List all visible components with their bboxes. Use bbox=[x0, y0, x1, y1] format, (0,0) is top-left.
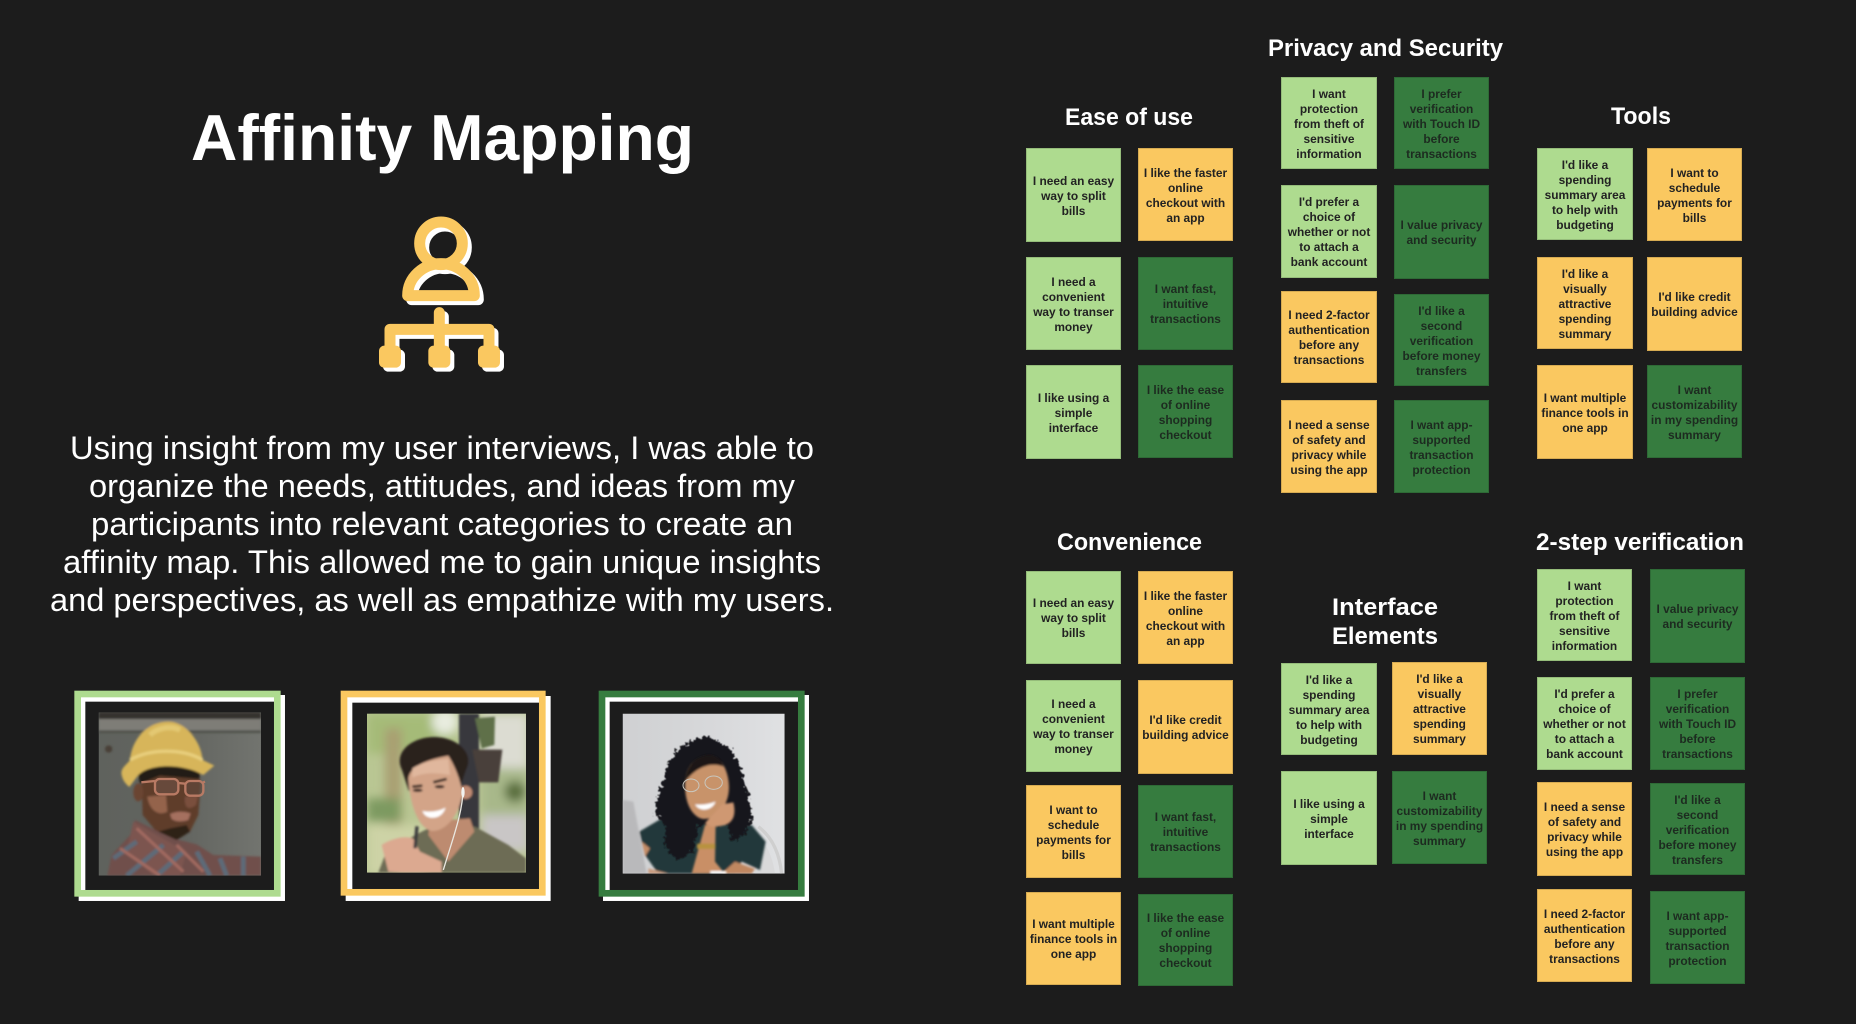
note: one app bbox=[1051, 947, 1096, 961]
note bbox=[1650, 891, 1745, 984]
note: I like using a bbox=[1038, 390, 1109, 404]
intro paragraph: and perspectives, as well as empathize with my users. bbox=[50, 582, 834, 618]
note bbox=[1392, 771, 1487, 864]
note: I need 2-factor bbox=[1288, 308, 1370, 322]
icon foreground bbox=[379, 222, 500, 368]
note: bills bbox=[1062, 626, 1085, 640]
title: Affinity Mapping bbox=[191, 101, 694, 174]
note bbox=[1026, 365, 1121, 459]
heading: Interface Elements bbox=[1332, 594, 1438, 650]
note: spending bbox=[1413, 717, 1466, 731]
note: I'd like a bbox=[1562, 158, 1608, 172]
note: sensitive bbox=[1304, 132, 1354, 146]
note: I want app- bbox=[1666, 908, 1729, 922]
note: checkout with bbox=[1146, 196, 1225, 210]
note: information bbox=[1296, 146, 1362, 160]
note: interface bbox=[1304, 826, 1354, 840]
note: I want bbox=[1678, 382, 1711, 396]
heading: Convenience: Convenience bbox=[1057, 529, 1202, 556]
intro paragraph: Using insight from my user interviews, I was able to bbox=[70, 430, 814, 466]
note bbox=[1650, 783, 1745, 875]
note bbox=[1647, 365, 1742, 458]
note: I'd like credit bbox=[1658, 290, 1731, 304]
note: I like the ease bbox=[1147, 911, 1224, 925]
photo: smiling woman with curly hair bbox=[623, 714, 785, 874]
note: transactions bbox=[1294, 353, 1364, 367]
note: I'd prefer a bbox=[1299, 195, 1359, 209]
note: intuitive bbox=[1163, 825, 1208, 839]
note: summary bbox=[1559, 326, 1611, 340]
note: verification bbox=[1666, 702, 1729, 716]
heading: Tools: Tools bbox=[1611, 103, 1671, 130]
note: I value privacy bbox=[1401, 218, 1482, 232]
panel: Privacy and Security notes bbox=[1281, 77, 1489, 493]
note bbox=[1537, 889, 1632, 982]
note: bank account bbox=[1291, 255, 1367, 269]
note bbox=[1537, 569, 1632, 661]
note: authentication bbox=[1288, 323, 1370, 337]
note: building advice bbox=[1651, 305, 1738, 319]
note: before money bbox=[1659, 838, 1736, 852]
note: transaction bbox=[1665, 938, 1730, 952]
note: budgeting bbox=[1556, 218, 1614, 232]
photo frame: participant 1 bbox=[78, 694, 282, 898]
note: bills bbox=[1683, 210, 1706, 224]
note: in my spending bbox=[1651, 412, 1738, 426]
note: to attach a bbox=[1555, 732, 1614, 746]
note: attractive bbox=[1413, 702, 1466, 716]
note: visually bbox=[1563, 282, 1607, 296]
note: second bbox=[1421, 318, 1462, 332]
panel: Interface Elements notes bbox=[1281, 662, 1487, 865]
note: schedule bbox=[1048, 818, 1099, 832]
note: I value privacy bbox=[1657, 602, 1738, 616]
note: checkout with bbox=[1146, 618, 1225, 632]
note: way to split bbox=[1041, 611, 1106, 625]
note: transaction bbox=[1409, 448, 1474, 462]
note: of safety and bbox=[1292, 432, 1366, 446]
note: I'd like credit bbox=[1149, 713, 1222, 727]
note: convenient bbox=[1042, 712, 1105, 726]
panel: Ease of use notes bbox=[1026, 148, 1233, 459]
note: transactions bbox=[1406, 146, 1477, 160]
note bbox=[1026, 148, 1121, 242]
note bbox=[1537, 782, 1632, 876]
note: I'd like a bbox=[1562, 266, 1608, 280]
note: second bbox=[1677, 808, 1718, 822]
note bbox=[1138, 257, 1233, 350]
note: transactions bbox=[1549, 952, 1620, 966]
curly hair bbox=[655, 737, 752, 860]
note: simple bbox=[1055, 406, 1092, 420]
note: summary area bbox=[1289, 702, 1369, 716]
note: I want app- bbox=[1410, 418, 1473, 432]
note: finance tools in bbox=[1030, 932, 1117, 946]
note: money bbox=[1054, 320, 1093, 334]
note: payments for bbox=[1036, 832, 1111, 846]
note: from theft of bbox=[1549, 608, 1620, 622]
note bbox=[1281, 291, 1377, 383]
heading: Interface Elements: Interface bbox=[1332, 594, 1438, 621]
note bbox=[1647, 148, 1742, 241]
note: one app bbox=[1562, 420, 1608, 434]
note: before any bbox=[1554, 936, 1615, 950]
intro paragraph bbox=[50, 430, 834, 618]
note: with Touch ID bbox=[1659, 717, 1736, 731]
note: I want fast, bbox=[1155, 810, 1216, 824]
note: transfers bbox=[1416, 364, 1467, 378]
note: an app bbox=[1166, 210, 1205, 224]
note: convenient bbox=[1042, 290, 1105, 304]
note: supported bbox=[1412, 432, 1471, 446]
note: and security bbox=[1662, 617, 1733, 631]
note bbox=[1026, 680, 1121, 772]
note: attractive bbox=[1559, 296, 1611, 310]
photo frame: participant 2 bbox=[344, 694, 547, 898]
note bbox=[1026, 571, 1121, 664]
note: sensitive bbox=[1559, 624, 1610, 638]
note: protection bbox=[1300, 102, 1358, 116]
panel: Tools notes bbox=[1537, 148, 1742, 459]
note: choice of bbox=[1558, 702, 1611, 716]
note: before money bbox=[1403, 348, 1480, 362]
note: with Touch ID bbox=[1403, 116, 1480, 130]
note: verification bbox=[1410, 102, 1473, 116]
note: of safety and bbox=[1548, 815, 1621, 829]
photo frame: participant 3 bbox=[602, 694, 806, 898]
note: to help with bbox=[1552, 202, 1618, 216]
note: money bbox=[1054, 742, 1093, 756]
note: I want multiple bbox=[1032, 917, 1115, 931]
note: I need an easy bbox=[1033, 174, 1114, 188]
note: I'd prefer a bbox=[1554, 687, 1615, 701]
note: I want bbox=[1312, 86, 1346, 100]
note: shopping bbox=[1159, 941, 1212, 955]
note: using the app bbox=[1546, 845, 1623, 859]
note bbox=[1650, 677, 1745, 770]
note: I need a sense bbox=[1288, 418, 1370, 432]
note bbox=[1537, 148, 1633, 240]
note bbox=[1394, 185, 1489, 279]
note: bills bbox=[1062, 204, 1085, 218]
note bbox=[1138, 680, 1233, 774]
note: I'd like a bbox=[1674, 792, 1721, 806]
note bbox=[1281, 771, 1377, 865]
note: schedule bbox=[1669, 180, 1720, 194]
note: visually bbox=[1418, 687, 1461, 701]
note bbox=[1138, 365, 1233, 458]
note: choice of bbox=[1303, 210, 1355, 224]
heading: 2-step verification: 2-step verification bbox=[1536, 529, 1744, 556]
note bbox=[1026, 257, 1121, 350]
note bbox=[1138, 894, 1233, 986]
note: customizability bbox=[1652, 398, 1737, 412]
note bbox=[1392, 662, 1487, 755]
note: checkout bbox=[1159, 956, 1212, 970]
note: intuitive bbox=[1163, 297, 1208, 311]
icon: person over hierarchy bbox=[379, 222, 504, 372]
note: online bbox=[1168, 604, 1203, 618]
intro paragraph: participants into relevant categories to create an bbox=[91, 506, 793, 542]
note: finance tools in bbox=[1541, 406, 1629, 420]
note: shopping bbox=[1159, 412, 1212, 426]
note: checkout bbox=[1159, 428, 1212, 442]
heading: Ease of use: Ease of use bbox=[1065, 104, 1193, 131]
note: and security bbox=[1406, 233, 1477, 247]
note bbox=[1138, 571, 1233, 664]
heading: Interface Elements: Elements bbox=[1332, 623, 1438, 650]
note: I prefer bbox=[1677, 687, 1718, 701]
note: verification bbox=[1410, 334, 1473, 348]
note: bank account bbox=[1546, 747, 1623, 761]
note bbox=[1281, 400, 1377, 493]
note: whether or not bbox=[1543, 717, 1626, 731]
note: way to transer bbox=[1033, 727, 1114, 741]
note: I'd like a bbox=[1306, 672, 1352, 686]
note: way to split bbox=[1041, 188, 1106, 202]
note: of online bbox=[1161, 398, 1210, 412]
note: protection bbox=[1412, 462, 1471, 476]
note bbox=[1537, 677, 1632, 770]
note: I'd like a bbox=[1418, 304, 1465, 318]
note: transfers bbox=[1672, 852, 1723, 866]
note: interface bbox=[1049, 420, 1098, 434]
note: I want to bbox=[1670, 166, 1719, 180]
note: budgeting bbox=[1300, 732, 1358, 746]
note: building advice bbox=[1142, 728, 1229, 742]
note: privacy while bbox=[1547, 830, 1622, 844]
note: spending bbox=[1559, 172, 1611, 186]
note: I want fast, bbox=[1155, 282, 1216, 296]
note: an app bbox=[1166, 634, 1205, 648]
note bbox=[1537, 257, 1633, 349]
note bbox=[1138, 148, 1233, 241]
note: I like the ease bbox=[1147, 382, 1224, 396]
heading: Privacy and Security: Privacy and Security bbox=[1268, 35, 1504, 62]
note: verification bbox=[1666, 822, 1729, 836]
note bbox=[1026, 785, 1121, 878]
note: I'd like a bbox=[1416, 672, 1463, 686]
note: summary bbox=[1413, 732, 1466, 746]
note: spending bbox=[1559, 312, 1611, 326]
note: I prefer bbox=[1421, 86, 1462, 100]
photo: man in yellow hard hat bbox=[99, 712, 261, 876]
note: whether or not bbox=[1288, 225, 1370, 239]
note: I want to bbox=[1049, 802, 1098, 816]
panel: 2-step verification notes bbox=[1537, 569, 1745, 984]
note: I need a bbox=[1051, 697, 1096, 711]
note: I like the faster bbox=[1144, 588, 1227, 602]
note: I want multiple bbox=[1544, 390, 1626, 404]
intro paragraph: organize the needs, attitudes, and ideas from my bbox=[89, 468, 795, 504]
note: simple bbox=[1310, 812, 1348, 826]
note: bills bbox=[1062, 848, 1085, 862]
note bbox=[1394, 400, 1489, 493]
note bbox=[1394, 294, 1489, 386]
note: privacy while bbox=[1292, 448, 1366, 462]
note bbox=[1647, 257, 1742, 351]
note bbox=[1138, 785, 1233, 878]
note: summary area bbox=[1545, 188, 1625, 202]
note: protection bbox=[1668, 954, 1727, 968]
note: before bbox=[1423, 132, 1460, 146]
note: from theft of bbox=[1294, 116, 1364, 130]
note: before any bbox=[1299, 338, 1359, 352]
note: transactions bbox=[1150, 840, 1221, 854]
note: I need a bbox=[1051, 274, 1096, 288]
note: payments for bbox=[1657, 196, 1732, 210]
panel: Convenience notes bbox=[1026, 571, 1233, 986]
note: authentication bbox=[1544, 922, 1625, 936]
note: I need a sense bbox=[1544, 800, 1625, 814]
note: online bbox=[1168, 180, 1203, 194]
note: supported bbox=[1668, 924, 1727, 938]
note: summary bbox=[1413, 834, 1466, 848]
note: spending bbox=[1303, 688, 1355, 702]
note: protection bbox=[1555, 594, 1614, 608]
note: before bbox=[1679, 732, 1716, 746]
note: transactions bbox=[1662, 747, 1733, 761]
icon shadow bbox=[383, 226, 504, 372]
note: I like the faster bbox=[1144, 166, 1227, 180]
note: customizability bbox=[1397, 804, 1482, 818]
note: to help with bbox=[1296, 718, 1362, 732]
note: I want bbox=[1568, 578, 1601, 592]
note: of online bbox=[1161, 926, 1210, 940]
note: transactions bbox=[1150, 312, 1221, 326]
intro paragraph: affinity map. This allowed me to gain unique insights bbox=[63, 544, 821, 580]
note bbox=[1281, 663, 1377, 755]
note: way to transer bbox=[1033, 304, 1114, 318]
note: in my spending bbox=[1396, 818, 1483, 832]
note bbox=[1281, 185, 1377, 278]
note: information bbox=[1552, 638, 1617, 652]
note: I need an easy bbox=[1033, 596, 1114, 610]
note: I need 2-factor bbox=[1544, 906, 1625, 920]
photo: smiling young man outdoors bbox=[367, 708, 528, 875]
note: I like using a bbox=[1293, 796, 1365, 810]
note bbox=[1650, 569, 1745, 663]
note: summary bbox=[1668, 428, 1721, 442]
note bbox=[1281, 77, 1377, 169]
note: to attach a bbox=[1299, 240, 1359, 254]
note: using the app bbox=[1290, 462, 1368, 476]
note: I want bbox=[1423, 788, 1456, 802]
note bbox=[1537, 365, 1633, 459]
note bbox=[1026, 892, 1121, 985]
note bbox=[1394, 77, 1489, 169]
